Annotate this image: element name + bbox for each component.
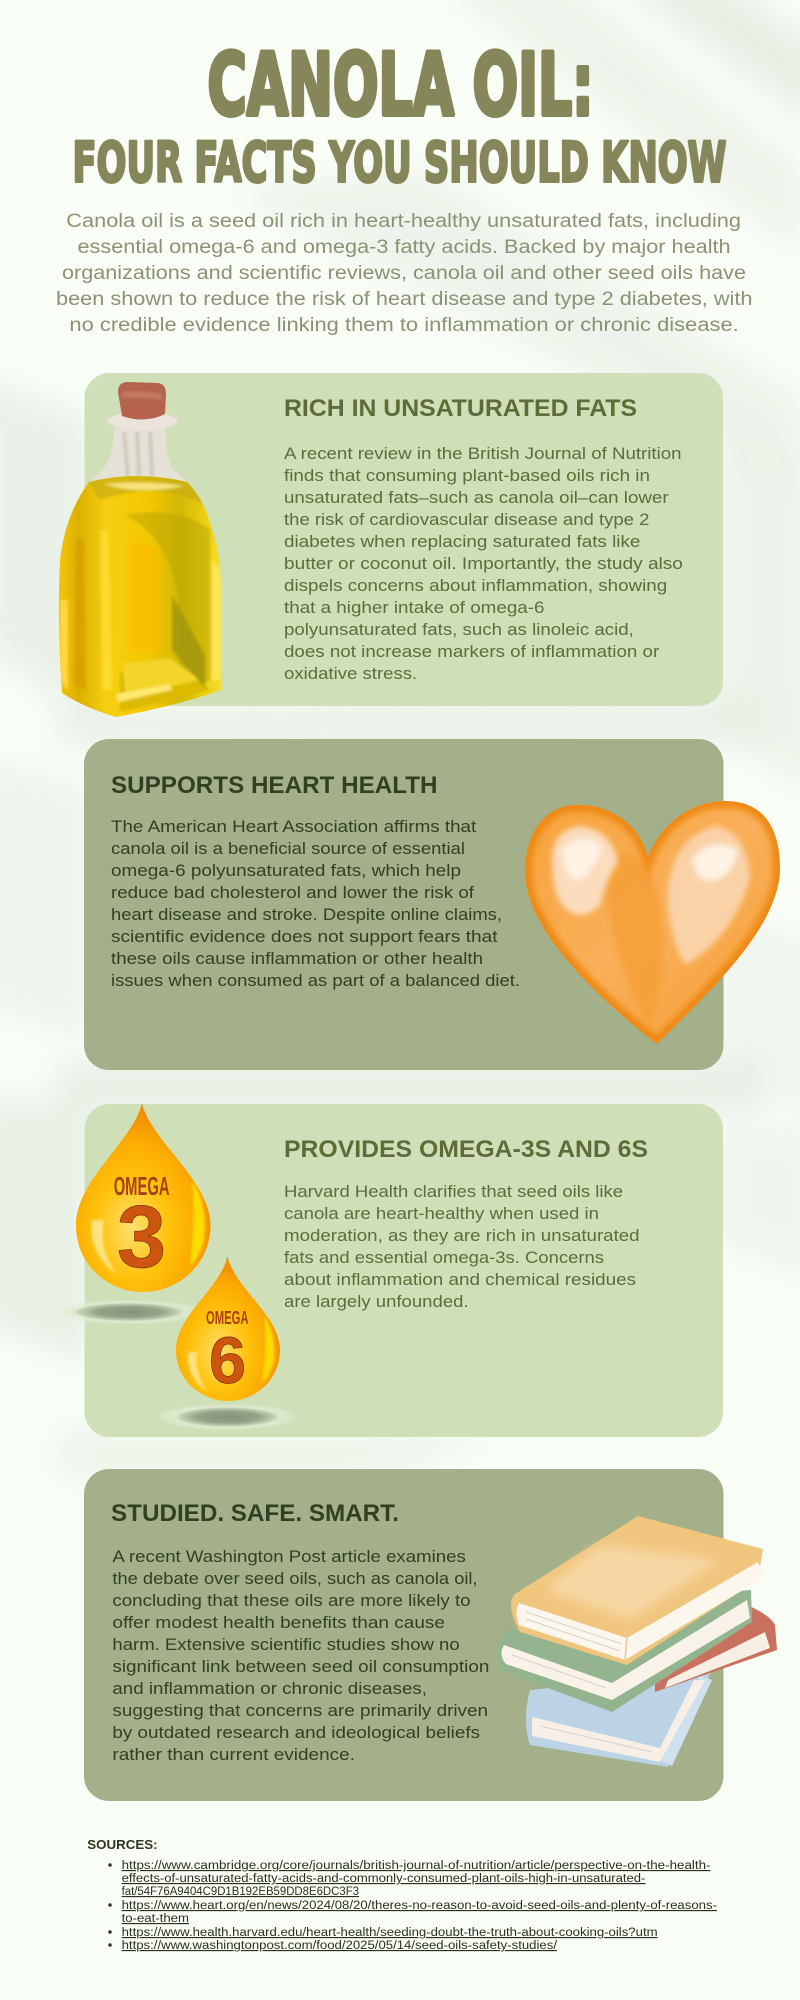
body text: unsaturated fats: diabetes when replacing saturated fats like	[284, 533, 640, 551]
body text: studied safe smart: offer modest health benefits than cause	[112, 1614, 445, 1632]
panel: supports heart health	[84, 739, 724, 1070]
panel: studied safe smart	[84, 1469, 724, 1801]
icon: omega-6 drop shadow	[160, 1404, 296, 1430]
body text: heart health: scientific evidence does not support fears that	[111, 928, 498, 946]
body text: studied safe smart: by outdated research and ideological beliefs	[112, 1724, 480, 1742]
body text: omega: Harvard Health clarifies that seed oils like	[284, 1183, 623, 1201]
panel: provides omega-3s and 6s	[84, 1104, 723, 1437]
panel: rich in unsaturated fats	[84, 373, 723, 706]
intro text block	[56, 211, 752, 336]
sources list	[108, 1860, 717, 1952]
icon: omega-3 drop shadow	[57, 1300, 201, 1324]
body text: unsaturated fats: the risk of cardiovascular disease and type 2	[284, 511, 649, 529]
body text: unsaturated fats: butter or coconut oil. Importantly, the study also	[284, 555, 683, 573]
body text: unsaturated fats: finds that consuming plant-based oils rich in	[284, 467, 650, 485]
body text: studied safe smart	[112, 1548, 489, 1764]
heading: provides omega: PROVIDES OMEGA-3S AND 6S	[284, 1136, 648, 1163]
body text: unsaturated fats: A recent review in the British Journal of Nutrition	[284, 445, 682, 463]
intro text block: Canola oil is a seed oil rich in heart-healthy unsaturated fats, including	[66, 211, 741, 232]
sources list: https://www.washingtonpost.com/food/2025/05/14/seed-oils-safety-studies/	[122, 1940, 558, 1952]
body text: studied safe smart: the debate over seed oils, such as canola oil,	[112, 1570, 478, 1588]
sources list: https://www.heart.org/en/news/2024/08/20/theres-no-reason-to-avoid-seed-oils-and-plenty-of-reasons-	[122, 1900, 717, 1912]
book: blue	[526, 1672, 712, 1767]
body text: unsaturated fats: does not increase markers of inflammation or	[284, 643, 660, 661]
sources heading: SOURCES:	[87, 1837, 158, 1852]
body text: unsaturated fats: that a higher intake of omega-6	[284, 599, 544, 617]
intro text block: organizations and scientific reviews, canola oil and other seed oils have	[62, 263, 746, 284]
body text: heart health: these oils cause inflammation or other health	[111, 950, 483, 968]
body text: studied safe smart: and inflammation or chronic diseases,	[112, 1680, 427, 1698]
body text: heart health: omega-6 polyunsaturated fats, which help	[111, 862, 461, 880]
body text: heart health: reduce bad cholesterol and lower the risk of	[111, 884, 474, 902]
body text: heart health: canola oil is a beneficial source of essential	[111, 840, 465, 858]
intro text block: essential omega-6 and omega-3 fatty acids. Backed by major health	[78, 237, 731, 258]
body text: unsaturated fats: dispels concerns about inflammation, showing	[284, 577, 667, 595]
icon: omega-6 drop: 6	[209, 1323, 246, 1397]
body text: omega	[284, 1183, 640, 1311]
icon: stack of books	[497, 1516, 777, 1767]
icon: oil bottle	[59, 382, 221, 717]
sources list: effects-of-unsaturated-fatty-acids-and-commonly-consumed-plant-oils-high-in-unsaturated-	[122, 1873, 646, 1885]
heading: rich in unsaturated fats: RICH IN UNSATURATED FATS	[284, 395, 637, 422]
body text: studied safe smart: suggesting that concerns are primarily driven	[112, 1702, 488, 1720]
body text: omega: about inflammation and chemical residues	[284, 1271, 636, 1289]
icon: omega-6 drop: OMEGA	[206, 1308, 248, 1328]
sources list: https://www.cambridge.org/core/journals/british-journal-of-nutrition/article/perspective-on-the-health-	[122, 1860, 711, 1872]
icon: orange heart	[525, 801, 780, 1044]
body text: studied safe smart: A recent Washington Post article examines	[112, 1548, 466, 1566]
intro text block: been shown to reduce the risk of heart disease and type 2 diabetes, with	[56, 289, 752, 310]
icon: omega-6 drop	[176, 1256, 280, 1401]
sources list: https://www.health.harvard.edu/heart-health/seeding-doubt-the-truth-about-cooking-oils?utm	[122, 1927, 658, 1939]
body text: omega: canola are heart-healthy when used in	[284, 1205, 599, 1223]
heading: supports heart health: SUPPORTS HEART HEALTH	[111, 772, 438, 799]
body text: studied safe smart: harm. Extensive scientific studies show no	[112, 1636, 460, 1654]
book: red	[655, 1605, 777, 1692]
sources list: fat/54F76A9404C9D1B192EB59DD8E6DC3F3	[122, 1886, 359, 1898]
body text: studied safe smart: significant link between seed oil consumption	[112, 1658, 489, 1676]
body text: heart health: issues when consumed as part of a balanced diet.	[111, 972, 520, 990]
intro text block: no credible evidence linking them to inflammation or chronic disease.	[69, 315, 739, 336]
sources list: to-eat-them	[122, 1913, 189, 1925]
body text: omega: moderation, as they are rich in unsaturated	[284, 1227, 640, 1245]
icon: omega-3 drop: OMEGA	[114, 1171, 170, 1201]
body text: unsaturated fats: polyunsaturated fats, such as linoleic acid,	[284, 621, 634, 639]
body text: heart health: The American Heart Association affirms that	[111, 818, 477, 836]
body text: omega: fats and essential omega-3s. Concerns	[284, 1249, 604, 1267]
book: green	[497, 1590, 752, 1712]
book: orange	[511, 1516, 765, 1665]
heading: studied safe smart: STUDIED. SAFE. SMART.	[111, 1500, 399, 1527]
body text: heart health: heart disease and stroke. Despite online claims,	[111, 906, 502, 924]
body text: studied safe smart: concluding that these oils are more likely to	[112, 1592, 471, 1610]
body text: unsaturated fats: oxidative stress.	[284, 665, 417, 683]
body text: omega: are largely unfounded.	[284, 1293, 469, 1311]
icon: omega-3 drop	[76, 1103, 210, 1292]
body text: unsaturated fats	[284, 445, 683, 683]
body text: unsaturated fats: unsaturated fats–such as canola oil–can lower	[284, 489, 669, 507]
body text: heart health	[111, 818, 520, 990]
icon: omega-3 drop: 3	[117, 1187, 166, 1286]
body text: studied safe smart: rather than current evidence.	[112, 1746, 355, 1764]
